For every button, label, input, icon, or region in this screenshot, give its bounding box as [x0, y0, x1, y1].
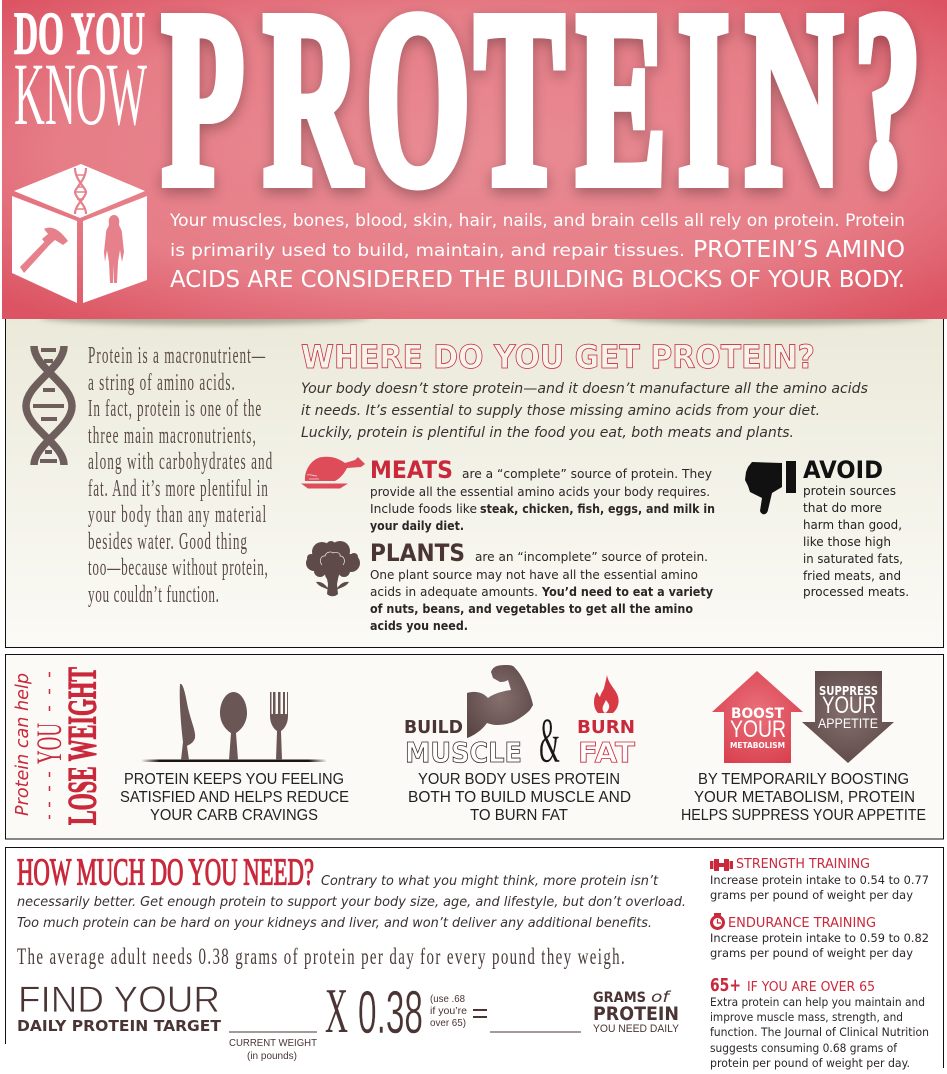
text block: avoid: processed meats. — [803, 584, 909, 599]
text block: macronutrient: too—because without protein, — [88, 555, 268, 581]
text block: macronutrient — [88, 343, 272, 608]
text block: macronutrient: fat. And it’s more plentiful in — [88, 476, 268, 502]
text: builds muscle burns fat: BOTH TO BUILD MUSCLE AND — [408, 789, 631, 806]
text block: over 65: Extra protein can help you maintain and — [710, 995, 925, 1009]
icon: flexed arm — [467, 665, 533, 738]
icon: stopwatch — [712, 913, 724, 928]
formula: weight times factor: YOU NEED DAILY — [593, 1023, 680, 1035]
text block: endurance training: Increase protein intake to 0.59 to 0.82 — [710, 931, 929, 945]
text block: plants: One plant source may not have all the essential amino — [370, 567, 698, 582]
text block: strength training: STRENGTH TRAINING — [736, 857, 870, 872]
text block: avoid: fried meats, and — [803, 568, 901, 583]
text: keeps you feeling — [120, 771, 349, 824]
text block: meats: MEATS — [370, 456, 453, 484]
text block: intro: PROTEIN’S AMINO — [693, 237, 905, 263]
text: keeps you feeling: YOUR CARB CRAVINGS — [150, 807, 318, 824]
arrow: boost metabolism — [712, 671, 803, 763]
text block: plants — [370, 539, 713, 633]
text block: plants: acids you need. — [370, 618, 468, 633]
text block: plants: of nuts, beans, and vegetables to get all the amino — [370, 601, 693, 616]
text block: intro — [169, 211, 905, 293]
text block: macronutrient: you couldn’t function. — [88, 582, 219, 608]
formula: weight times factor: 0.38 — [358, 979, 423, 1046]
text block: avoid: like those high — [803, 534, 891, 549]
icon: roast chicken — [301, 457, 365, 488]
text block: more is not better: Too much protein can be hard on your kidneys and liver, and won’t deliver any additional benefits. — [17, 915, 652, 931]
text block: avoid: that do more — [803, 500, 882, 515]
text: average adult need: The average adult needs 0.38 grams of protein per day for every pound they weigh. — [17, 945, 625, 970]
panel: lose weight — [6, 654, 944, 839]
text: builds muscle burns fat — [408, 771, 631, 824]
formula: weight times factor: if you’re — [430, 1005, 467, 1017]
heading: protein can help you lose weight: Protein can help — [12, 673, 33, 816]
text block: plants: You’d need to eat a variety — [541, 584, 713, 599]
heading: protein can help you lose weight — [12, 667, 104, 825]
heading: build muscle and burn fat — [404, 705, 635, 777]
text block: meats: steak, chicken, fish, eggs, and milk in — [480, 501, 715, 516]
formula: weight times factor: X — [325, 975, 348, 1046]
formula: weight times factor: over 65) — [430, 1017, 466, 1029]
title: do you know — [14, 2, 147, 144]
panel: header banner — [2, 0, 947, 319]
icon: dna helix — [26, 346, 72, 465]
text block: plants: are an “incomplete” source of protein. — [475, 549, 708, 564]
text block: body intro: Your body doesn’t store protein—and it doesn’t manufacture all the amino acids — [301, 381, 868, 397]
text block: macronutrient: three main macronutrients, — [88, 423, 256, 449]
text block: intro: Your muscles, bones, blood, skin, hair, nails, and brain cells all rely on protein. Protein — [169, 211, 905, 231]
text block: body intro: Luckily, protein is plentiful in the food you eat, both meats and plants. — [301, 425, 794, 441]
text block: macronutrient: besides water. Good thing — [88, 529, 247, 555]
arrow: boost metabolism: BOOST — [731, 706, 784, 722]
text block: endurance training: grams per pound of weight per day — [710, 946, 913, 960]
text block: more is not better — [17, 873, 686, 931]
heading: build muscle and burn fat: BUILD — [404, 717, 463, 738]
text block: more is not better: Contrary to what you might think, more protein isn’t — [321, 873, 659, 889]
text block: plants: PLANTS — [370, 539, 465, 567]
text block: macronutrient: along with carbohydrates and — [88, 449, 272, 475]
text block: meats: Include foods like — [370, 501, 477, 516]
heading: build muscle and burn fat: FAT — [578, 737, 635, 769]
text block: over 65: IF YOU ARE OVER 65 — [747, 980, 875, 995]
formula: weight times factor: (use .68 — [430, 993, 465, 1005]
text block: meats: provide all the essential amino acids your body requires. — [370, 484, 710, 499]
text block: over 65: suggests consuming 0.68 grams of — [710, 1041, 898, 1055]
icon: flame — [594, 675, 619, 713]
heading: build muscle and burn fat: & — [539, 705, 560, 777]
formula: weight times factor: of — [651, 988, 672, 1006]
text block: strength training: grams per pound of weight per day — [710, 888, 913, 902]
text block: over 65: 65+ — [710, 975, 741, 996]
heading: protein can help you lose weight: LOSE WEIGHT — [60, 667, 104, 825]
heading: how much do you need: HOW MUCH DO YOU NEED? — [17, 851, 314, 893]
panel: header banner: KNOW — [14, 46, 147, 144]
text block: macronutrient: In fact, protein is one of the — [88, 396, 261, 422]
text block: avoid: protein sources — [803, 483, 896, 498]
text: builds muscle burns fat: YOUR BODY USES PROTEIN — [418, 771, 620, 788]
text: boosts metabolism — [681, 771, 926, 824]
panel: how much do you need — [6, 848, 944, 1074]
arrow: suppress appetite: SUPPRESS — [819, 684, 878, 698]
text block: plants: acids in adequate amounts. — [370, 584, 538, 599]
heading: protein can help you lose weight: YOU — [29, 723, 69, 764]
arrow: suppress appetite: YOUR — [822, 692, 876, 719]
formula: weight times factor: GRAMS — [593, 990, 646, 1006]
formula: weight times factor: CURRENT WEIGHT — [229, 1037, 318, 1049]
formula: weight times factor — [229, 975, 680, 1062]
text block: over 65: protein per pound of weight per day. — [710, 1056, 910, 1070]
text block: meats — [370, 456, 715, 533]
heading: find your daily protein target: FIND YOUR — [18, 978, 220, 1020]
arrow: suppress appetite: APPETITE — [818, 715, 878, 731]
text block: meats: are a “complete” source of protein. They — [462, 466, 713, 481]
text: boosts metabolism: BY TEMPORARILY BOOSTING — [698, 771, 909, 788]
icon: thumbs down — [745, 461, 796, 514]
text block: body intro — [301, 381, 868, 441]
text block: over 65: improve muscle mass, strength, and — [710, 1010, 903, 1024]
icon: knife spoon fork — [141, 684, 327, 762]
text: keeps you feeling: PROTEIN KEEPS YOU FEELING — [124, 771, 344, 788]
icon: building block cube — [12, 164, 147, 303]
text: builds muscle burns fat: TO BURN FAT — [470, 807, 568, 824]
icon: dumbbell — [710, 859, 733, 871]
text block: meats: your daily diet. — [370, 518, 464, 533]
text block: over 65 — [710, 975, 929, 1070]
text block: avoid: harm than good, — [803, 517, 902, 532]
formula: weight times factor: PROTEIN — [593, 1003, 679, 1025]
heading: where do you get protein: WHERE DO YOU GET PROTEIN? — [301, 338, 815, 376]
heading: find your daily protein target: DAILY PROTEIN TARGET — [17, 1017, 222, 1035]
text block: avoid — [803, 456, 909, 599]
title: do you know: DO YOU — [14, 2, 145, 67]
text block: macronutrient: Protein is a macronutrient— — [88, 343, 266, 369]
text block: strength training: Increase protein intake to 0.54 to 0.77 — [710, 873, 929, 887]
text block: macronutrient: your body than any material — [88, 502, 266, 528]
text block: strength training — [710, 857, 929, 902]
arrow: boost metabolism: YOUR — [730, 716, 786, 743]
text: boosts metabolism: YOUR METABOLISM, PROTEIN — [694, 789, 915, 806]
arrow: boost metabolism: METABOLISM — [730, 741, 785, 750]
text block: more is not better: necessarily better. Get enough protein to support your body size, age, and lifestyle, but don’t overload. — [17, 894, 686, 910]
text block: macronutrient: a string of amino acids. — [88, 370, 235, 396]
text block: body intro: it needs. It’s essential to supply those missing amino acids from your diet. — [301, 403, 820, 419]
text block: avoid: AVOID — [803, 456, 883, 484]
text block: over 65: function. The Journal of Clinical Nutrition — [710, 1025, 929, 1039]
panel: where do you get protein — [6, 309, 944, 648]
text block: endurance training — [710, 916, 929, 960]
formula: weight times factor: (in pounds) — [247, 1050, 297, 1062]
icon: broccoli — [306, 541, 360, 596]
heading: build muscle and burn fat: MUSCLE — [405, 737, 522, 769]
text block: avoid: in saturated fats, — [803, 551, 903, 566]
arrow: suppress appetite — [802, 671, 894, 763]
text block: intro: ACIDS ARE CONSIDERED THE BUILDING BLOCKS OF YOUR BODY. — [170, 267, 905, 293]
heading: build muscle and burn fat: BURN — [577, 717, 635, 738]
text: keeps you feeling: SATISFIED AND HELPS REDUCE — [120, 789, 349, 806]
text block: endurance training: ENDURANCE TRAINING — [728, 916, 876, 931]
text block: intro: is primarily used to build, maintain, and repair tissues. — [170, 241, 685, 261]
